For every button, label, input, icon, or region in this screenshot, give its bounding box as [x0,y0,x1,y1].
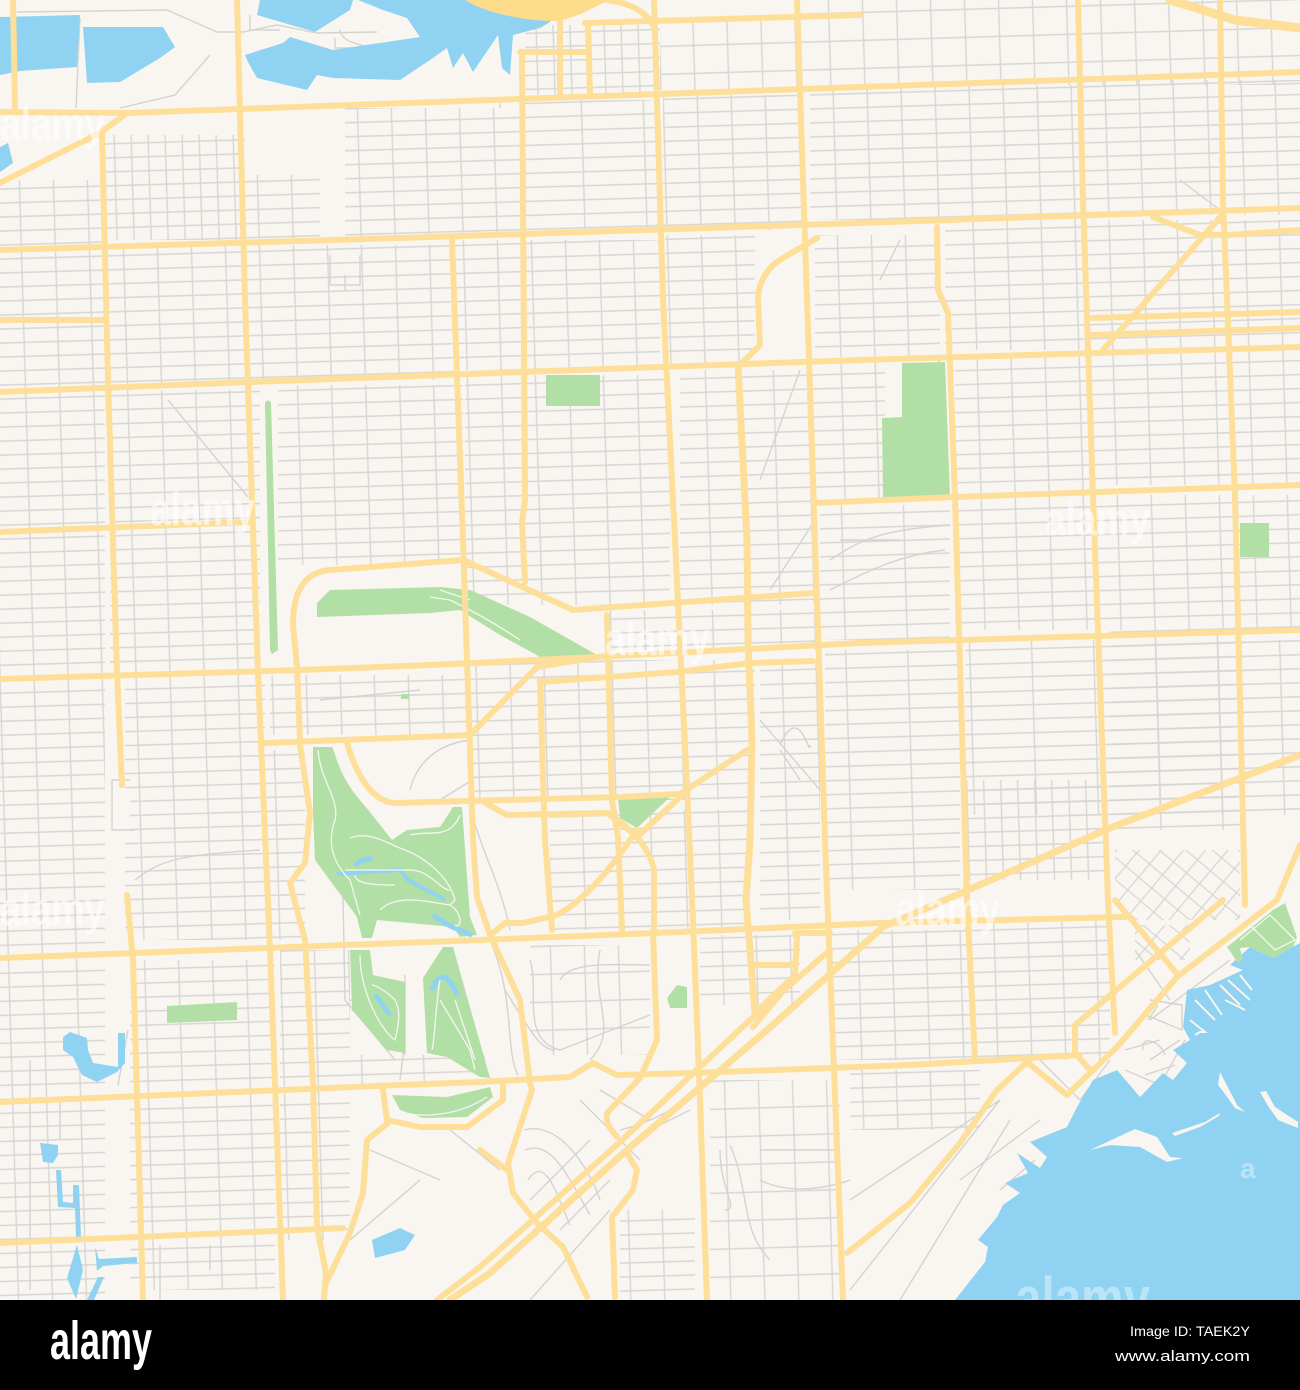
watermark: land lettering row one: alamy [150,483,255,535]
park: small south [667,985,687,1008]
park: north-east block [882,362,950,497]
road: southern loop [383,1083,587,1297]
park: south-west field [167,1002,237,1023]
image id: Image ID: TAEK2Y [1130,1323,1251,1339]
water: southern pond [372,1228,415,1258]
park paths [318,590,1295,1115]
water: north bay [245,0,560,90]
park: lower right [423,947,490,1078]
park: bottom oval [392,1087,493,1118]
road: north-west diagonal [0,113,127,183]
road: shoreline boulevard [847,845,1300,1253]
road: diagonal north-east [1103,215,1222,350]
footer bar [0,1300,1300,1390]
parks [167,362,1297,1118]
website: www.alamy.com [1114,1348,1250,1365]
watermark: land lettering row two: alamy [605,613,710,665]
bay islands [1090,1072,1298,1162]
watermark: land lettering row three: alamy [1045,493,1150,545]
park: triangle [618,797,670,828]
park: east square [1240,523,1269,557]
watermark: land lettering row four: alamy [895,883,1000,935]
water: north-west reservoirs [0,15,175,172]
docks in the bay [1190,975,1252,1035]
watermark: land lettering row five: alamy [0,883,105,935]
park: narrow strip [265,400,278,654]
blank land overlays [105,108,344,830]
road: top interchange [467,0,607,20]
road: ring around golf course [293,560,813,740]
park: shoreline [1227,903,1297,963]
park: lower left [350,950,405,1053]
park ponds and streams [337,858,472,1015]
watermark: bay letter: a [1240,1153,1256,1184]
road: freeway [437,950,830,1300]
watermarks [1015,1153,1256,1331]
park: north square [546,375,600,406]
road: curved connector [740,238,817,365]
water: south-west lake [63,1032,125,1082]
water: south-west canal [40,1143,137,1300]
park: tiny [401,694,409,699]
footer logo: alamy [50,1311,152,1371]
park: large central [313,747,477,938]
watermark: bay lettering: alamy [1015,1266,1150,1331]
watermark: land lettering row six: alamy [0,98,105,150]
water: south-east bay [955,943,1300,1300]
park: upper golf course [317,587,597,658]
